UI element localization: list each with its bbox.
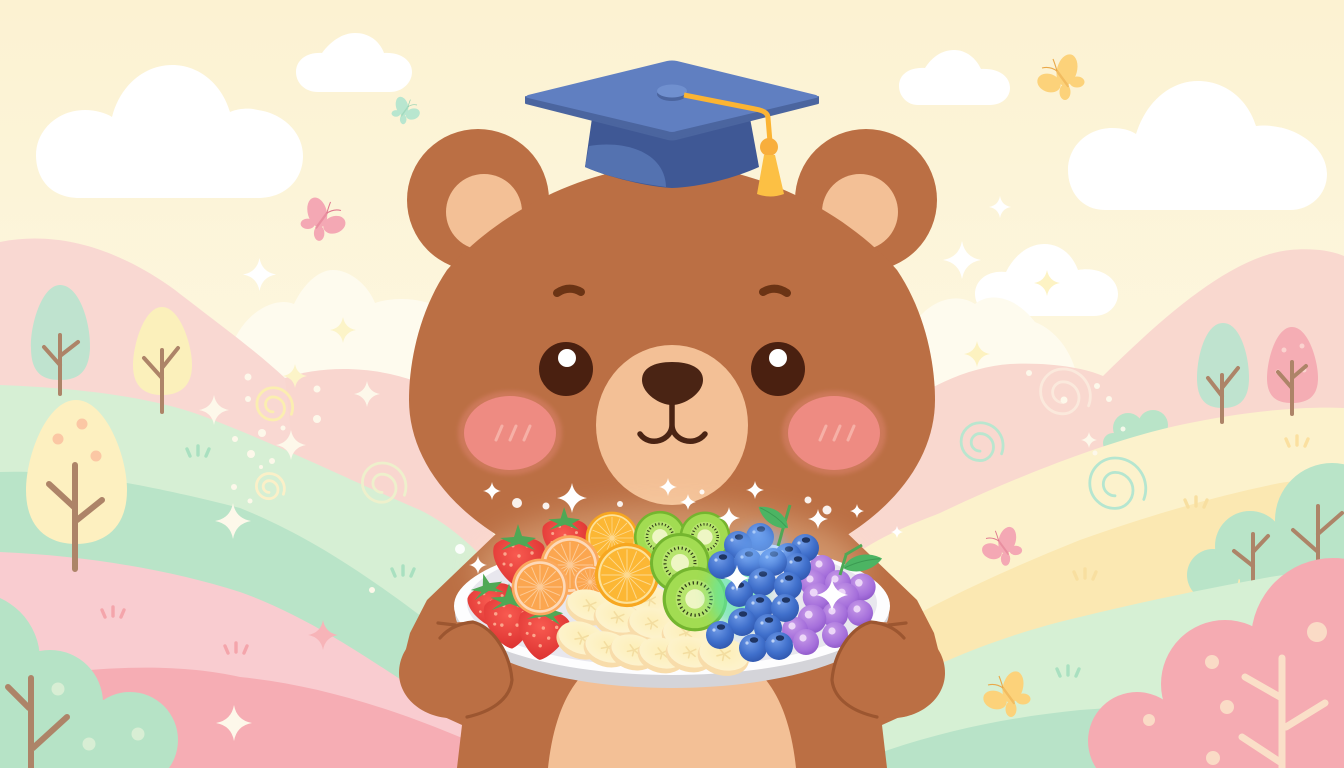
tree: green back left (31, 285, 90, 394)
mouth (640, 404, 705, 441)
eyes (539, 342, 805, 396)
cloud mid right (975, 244, 1118, 316)
cloud top right large (1068, 81, 1327, 210)
bush: green right cluster (1187, 463, 1344, 601)
plate (454, 536, 890, 688)
eyebrows (557, 289, 787, 293)
green glow (710, 554, 766, 630)
bear (400, 129, 944, 768)
cap base highlight (585, 145, 666, 187)
cloud top centre small (296, 33, 412, 92)
graduation cap (526, 60, 818, 196)
kiwi slices back (634, 511, 730, 563)
bush: large pink right (1088, 558, 1344, 768)
tree: large yellow front left (26, 400, 127, 569)
cap board underside (526, 97, 818, 140)
trees left (0, 285, 192, 768)
hills right (840, 249, 1344, 768)
strawberries (462, 507, 588, 664)
leaves (754, 502, 883, 575)
faint clouds behind bear (232, 270, 1078, 420)
bear ears (407, 129, 937, 271)
grass tufts (102, 436, 1308, 676)
bush: pink small left (124, 542, 213, 586)
bush: green bottom left (0, 592, 178, 768)
cap base (585, 118, 759, 188)
glow behind fruit (475, 505, 865, 635)
cloud top left large (36, 65, 303, 198)
citrus and kiwi front (595, 533, 727, 631)
bear body (400, 530, 944, 768)
bear head (409, 165, 935, 610)
banana slices (552, 582, 753, 681)
tree: green right (1197, 323, 1249, 422)
hills left (0, 239, 510, 768)
fruit sparkles (455, 478, 903, 611)
bear belly (548, 680, 796, 768)
muzzle (596, 345, 748, 505)
blue glow (738, 528, 786, 568)
cheeks (458, 391, 886, 475)
blueberries (706, 523, 819, 662)
tree: pink right (1267, 327, 1318, 414)
swirls (256, 369, 1146, 508)
left paw (399, 622, 512, 718)
background sparkles (199, 196, 1112, 741)
clouds (36, 33, 1327, 316)
butterflies (301, 52, 1084, 717)
cap button (657, 84, 687, 101)
tassel (684, 95, 784, 196)
nose (642, 362, 703, 405)
citrus slices (512, 512, 638, 615)
tree: yellow back left (133, 307, 192, 412)
trees right (1088, 323, 1344, 768)
cloud top right small (899, 50, 1010, 105)
bear paws (399, 622, 945, 718)
bush: green small right (1103, 410, 1168, 453)
plate with fruit (454, 478, 903, 688)
cap board top (526, 60, 818, 132)
right paw (832, 622, 945, 718)
grapes (782, 555, 876, 655)
